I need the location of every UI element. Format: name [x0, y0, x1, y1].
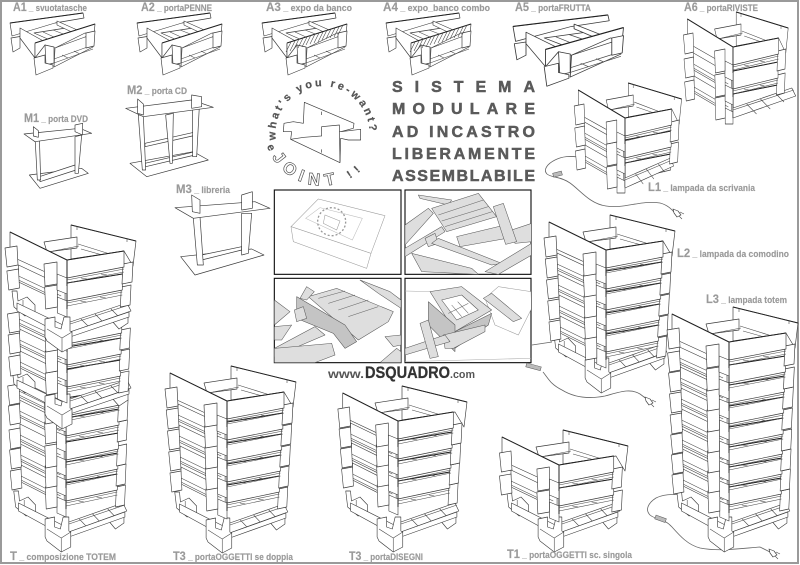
module A6 portaRIVISTE: [683, 0, 796, 124]
module M3 libreria: [175, 182, 270, 275]
drawing: A5: [513, 15, 624, 86]
title line 1: SISTEMA: [392, 79, 535, 96]
label: A5: A5 _ portaFRUTTA: [515, 0, 591, 14]
logo arc path top: [276, 86, 370, 140]
title line 5: ASSEMBLABILE: [392, 168, 535, 185]
tower T1 portaOGGETTI singola: [499, 430, 633, 561]
lamp drawing L1: [574, 83, 682, 193]
drawing: [499, 430, 628, 552]
drawing: M1: [24, 123, 92, 188]
upper section: [5, 225, 136, 352]
lamp L1 scrivania: [545, 83, 756, 219]
tower T3 portaOGGETTI se doppia: [165, 366, 296, 563]
module M2 porta CD: [126, 83, 213, 177]
lamp L2 comodino: [526, 215, 789, 407]
drawing: M3: [175, 192, 270, 275]
module A1 svuotatasche: [10, 0, 95, 75]
plug L2: [645, 397, 656, 407]
website url: [327, 363, 475, 382]
cord L3: [648, 494, 772, 553]
module A4 expo banco combo: [383, 0, 490, 75]
drawing: A3: [262, 13, 347, 75]
cord L1: [545, 156, 675, 213]
plug L1: [673, 209, 684, 219]
cord L2: [532, 342, 648, 400]
switch L1: [553, 171, 562, 177]
lower section: [8, 380, 128, 552]
label: M2: M2 _ porta CD: [127, 83, 187, 97]
label: T3 _ portaOGGETTI se doppia: [173, 549, 294, 563]
drawing: A2: [137, 13, 222, 75]
photo panels: assembly sequence: [274, 190, 532, 363]
label: T3 _ portaDISEGNI: [349, 549, 423, 563]
plug L3: [769, 549, 780, 559]
switch L2: [526, 363, 541, 371]
url prefix: www.: [327, 367, 364, 381]
title line 3: AD INCASTRO: [392, 124, 535, 141]
title line 4: LIBERAMENTE: [392, 146, 535, 163]
lamp drawing L3: [667, 307, 798, 552]
logo joint piece: [283, 102, 361, 163]
label: T1 _ portaOGGETTI sc. singola: [507, 547, 633, 561]
label L1: L1 _ lampada da scrivania: [648, 180, 756, 194]
label L3: L3 _ lampada totem: [706, 292, 787, 306]
lamp drawing L2: [544, 215, 675, 393]
logo arc path bottom: [267, 146, 377, 186]
drawing: A6: [683, 12, 796, 124]
logo lower text: eJOINT !!: [268, 144, 360, 186]
panel: scattered parts: [405, 190, 532, 274]
lamp L3 totem: [648, 292, 798, 559]
label: A3: A3 _ expo da banco: [266, 0, 352, 14]
label: A6: A6 _ portaRIVISTE: [684, 0, 758, 14]
drawing: [338, 386, 467, 552]
label L2: L2 _ lampada da comodino: [677, 246, 789, 260]
tower T3 portaDISEGNI: [338, 386, 467, 563]
module A2 portaPENNE: [137, 0, 222, 75]
url suffix: .com: [450, 369, 475, 381]
panel: box: [274, 190, 401, 274]
module M1 porta DVD: [24, 111, 92, 188]
label: A1: A1 _ svuotatasche: [13, 0, 87, 14]
drawing: [165, 366, 296, 553]
drawing: M2: [126, 95, 213, 177]
title line 2: MODULARE: [392, 101, 535, 118]
panel: assembled crate: [405, 278, 532, 363]
panel: partial assembly: [274, 278, 401, 363]
drawing: A4: [386, 13, 471, 75]
drawing: A1: [10, 13, 95, 75]
title: sistema modulare: [392, 79, 535, 185]
label: A2: A2 _ portaPENNE: [141, 0, 212, 14]
logo: what's you re-want: [268, 80, 377, 186]
label T: T _ composizione TOTEM: [10, 549, 116, 563]
logo ring text: what's you re-want?: [268, 80, 377, 140]
label: M3: M3 _ libreria: [176, 182, 231, 196]
composition T totem: [5, 225, 136, 563]
label: M1: M1 _ porta DVD: [24, 111, 88, 125]
url brand: DSQUADRO: [365, 363, 450, 382]
middle section: [7, 308, 131, 429]
switch L3: [655, 515, 666, 523]
module A5 portaFRUTTA: [513, 0, 624, 86]
module A3 expo da banco: [262, 0, 352, 75]
label: A4: A4 _ expo_banco combo: [383, 0, 490, 14]
